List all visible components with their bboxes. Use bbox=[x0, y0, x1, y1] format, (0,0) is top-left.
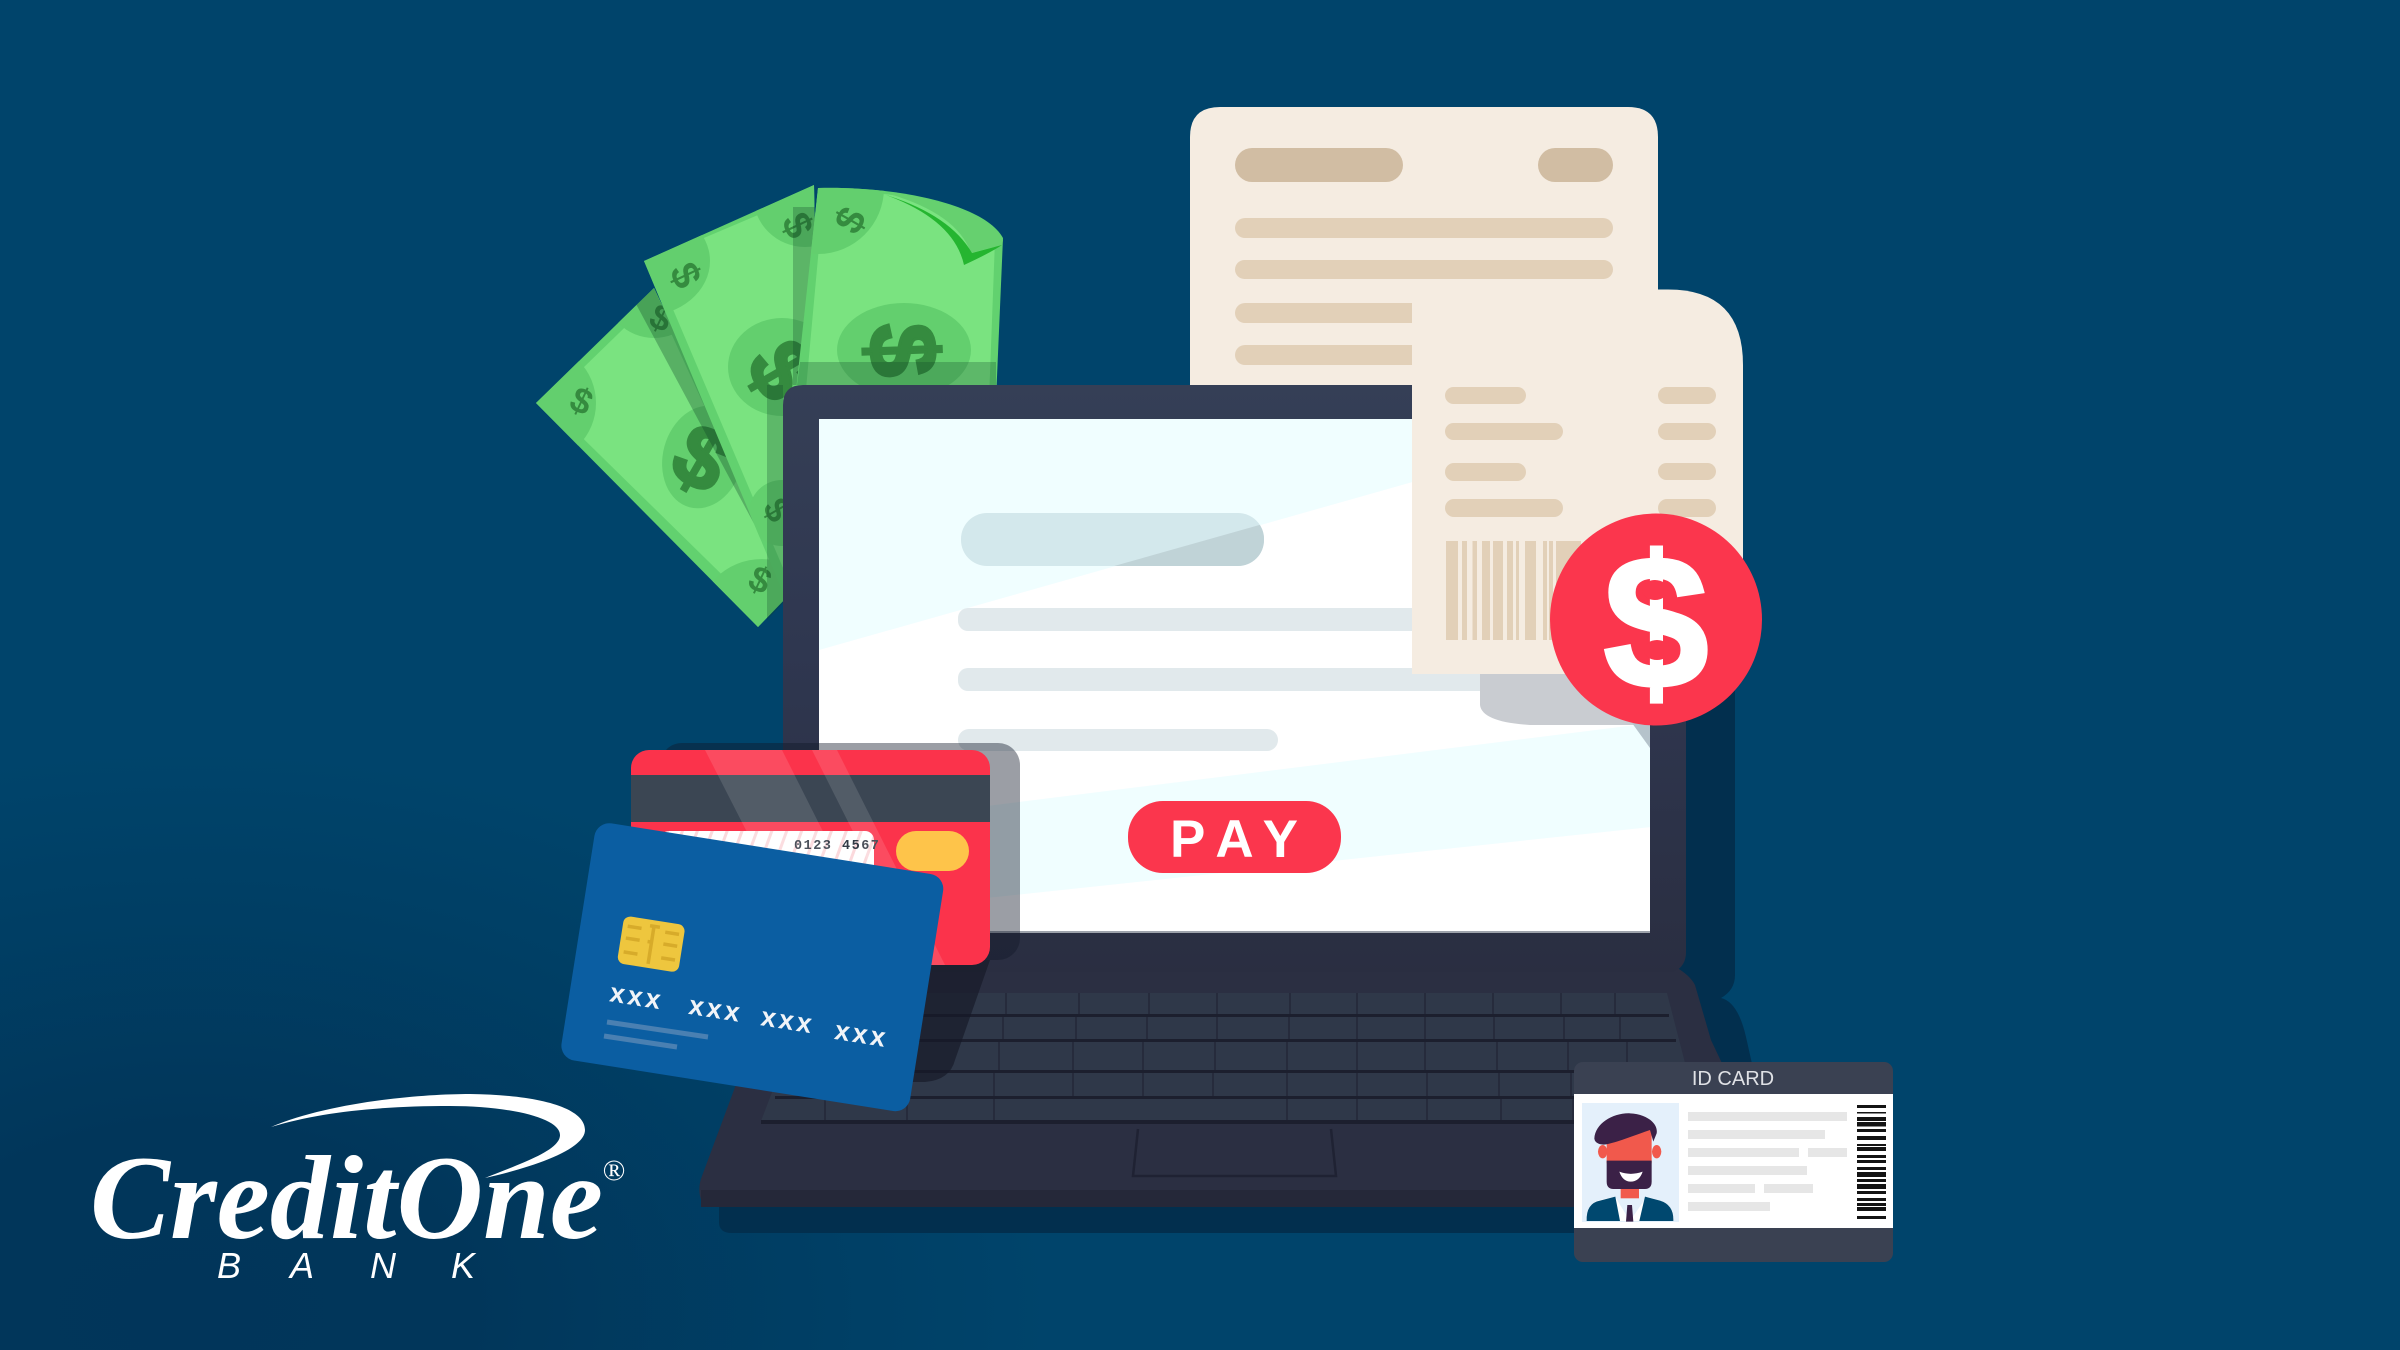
banknote: left bbox=[536, 288, 783, 627]
icon: red dollar badge bbox=[1550, 514, 1762, 729]
icon: fan of green banknotes bbox=[536, 185, 1003, 627]
ID details bbox=[1688, 1112, 1847, 1211]
banknote: middle: $ bbox=[727, 324, 838, 416]
banknote: left: $ bbox=[656, 402, 748, 513]
ID photo bbox=[1582, 1103, 1679, 1222]
laptop shadow on banknotes bbox=[767, 362, 996, 620]
banknote: right with curled corner bbox=[796, 188, 1003, 385]
card number mask: xxx bbox=[833, 1015, 891, 1053]
receipt barcode bbox=[1446, 541, 1581, 640]
banknote: middle: $ bbox=[755, 491, 800, 529]
ID barcode bbox=[1857, 1105, 1886, 1219]
card number mask bbox=[607, 977, 891, 1053]
trackpad bbox=[1133, 1129, 1336, 1176]
credit card: blue front bbox=[559, 821, 945, 1113]
logo subline: BANK bbox=[217, 1245, 477, 1286]
banknote: left: $ bbox=[742, 557, 778, 602]
banknote: left: $ bbox=[564, 378, 599, 423]
receipt: large back sheet bbox=[1190, 107, 1658, 385]
banknote: left: $ bbox=[643, 295, 679, 340]
card security pill bbox=[896, 831, 969, 871]
laptop lid frame bbox=[783, 385, 1686, 975]
icon: red dollar badge: $ bbox=[1603, 517, 1709, 729]
laptop shadow bbox=[719, 690, 1790, 1233]
logo registered mark: ® bbox=[603, 1154, 625, 1187]
screen: heading bar bbox=[961, 513, 1264, 566]
screen: PAY button bbox=[1128, 801, 1341, 873]
keyboard bbox=[761, 993, 1701, 1124]
logo wordmark: CreditOne bbox=[90, 1131, 603, 1264]
card number mask: xxx bbox=[687, 990, 745, 1028]
laptop base bbox=[699, 950, 1790, 1207]
banknote: right with curled corner: $ bbox=[826, 200, 875, 241]
card number mask: xxx bbox=[608, 977, 666, 1016]
card number mask: xxx bbox=[759, 1001, 817, 1039]
ID card heading: ID CARD bbox=[1692, 1068, 1774, 1090]
receipt: small front sheet bbox=[1412, 290, 1743, 674]
card name lines bbox=[604, 1022, 708, 1047]
signature panel bbox=[665, 831, 878, 865]
screen: white diagonal bbox=[819, 482, 1634, 806]
banknote: middle bbox=[644, 185, 815, 572]
ID card bbox=[1574, 1062, 1893, 1262]
banknote: right with curled corner: $ bbox=[848, 322, 957, 379]
banknote: middle: $ bbox=[660, 256, 710, 295]
logo swoosh bbox=[271, 1094, 585, 1178]
shadow of small receipt bbox=[1480, 670, 1650, 748]
shadows of credit cards bbox=[660, 743, 1020, 1082]
credit card: red back bbox=[631, 750, 990, 965]
screen: text lines bbox=[958, 608, 1498, 751]
banknote: middle: $ bbox=[772, 206, 822, 245]
laptop bbox=[699, 385, 1790, 1207]
screen: PAY button: PAY bbox=[1170, 810, 1298, 869]
signature panel: 0123 4567 bbox=[794, 839, 880, 854]
laptop screen bbox=[819, 412, 1660, 940]
icon: curled corner bbox=[886, 193, 1003, 265]
logo: Credit One Bank bbox=[90, 1094, 625, 1286]
card chip bbox=[617, 916, 686, 973]
